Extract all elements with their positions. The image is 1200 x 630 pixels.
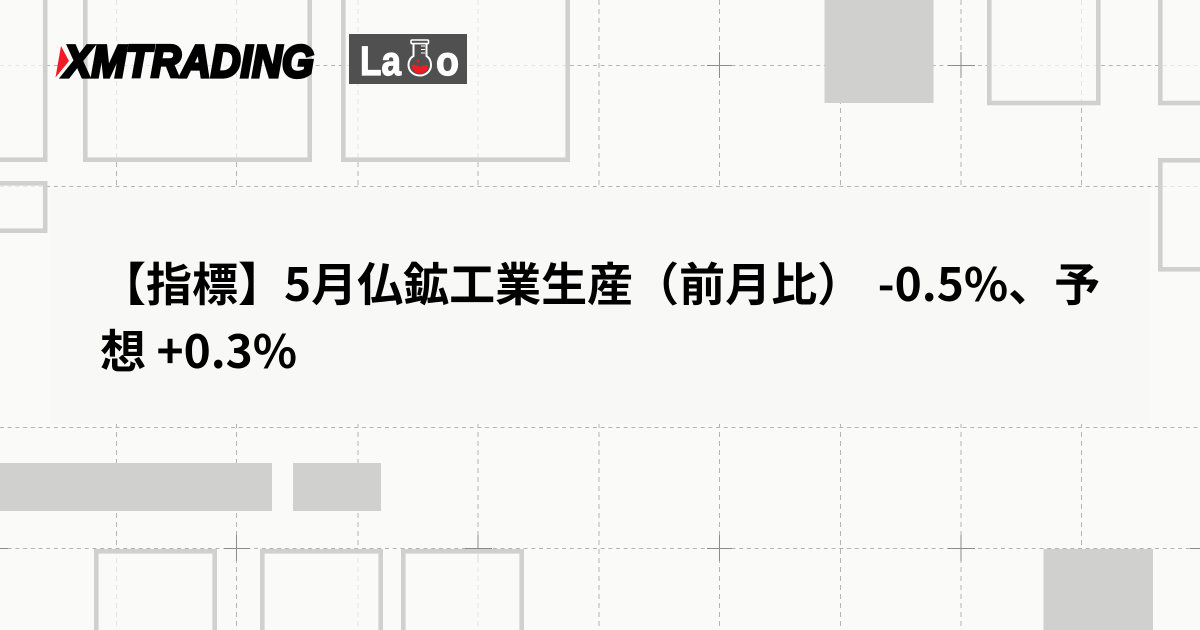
logo background [349,34,467,84]
icon: red arrow [56,46,69,78]
icon: flask [408,40,431,76]
title: 【指標】5月仏鉱工業生産（前月比） -0.5%、予 [100,249,1100,315]
title: 想 +0.3% [100,316,297,382]
wordmark letter o: o [436,38,459,84]
wordmark: XMTRADING [61,36,314,87]
wordmark letters: La [360,38,402,84]
title [100,249,1100,382]
logo: Lab [349,34,467,84]
